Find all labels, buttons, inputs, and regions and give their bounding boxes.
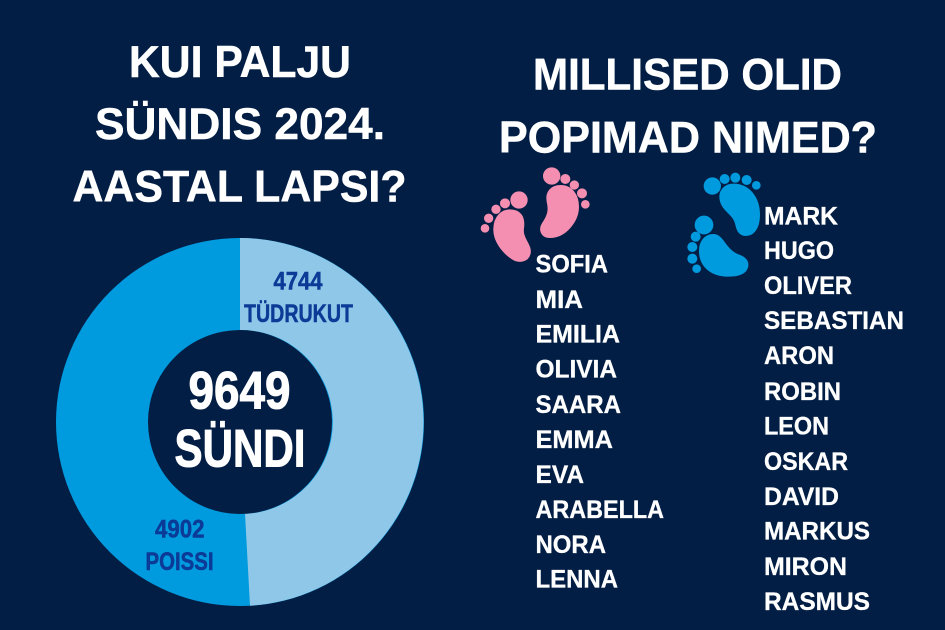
list: popular girl names: NORA [536, 532, 606, 559]
list: popular girl names [536, 252, 664, 594]
list: popular boy names [764, 204, 904, 616]
list: popular boy names: ROBIN [764, 379, 841, 406]
donut chart: births by sex [56, 238, 424, 606]
title: births heading: AASTAL LAPSI? [72, 162, 406, 212]
list: popular boy names: RASMUS [764, 589, 870, 616]
label: boys count: POISSI [146, 548, 214, 576]
list: popular girl names: MIA [536, 287, 583, 314]
list: popular boy names: OSKAR [764, 449, 848, 476]
donut segment: boys [56, 238, 424, 606]
list: popular girl names: ARABELLA [536, 497, 664, 524]
list: popular girl names: EVA [536, 462, 584, 489]
list: popular boy names: MARKUS [764, 518, 870, 546]
centre total: SÜNDI [174, 420, 306, 478]
centre total [174, 362, 306, 478]
label: girls count: TÜDRUKUT [244, 299, 353, 328]
list: popular boy names: HUGO [764, 238, 834, 265]
title: names heading: MILLISED OLID [533, 50, 842, 100]
title: births heading [72, 38, 406, 212]
label: boys count: 4902 [155, 516, 204, 544]
list: popular girl names: EMMA [536, 427, 613, 454]
list: popular boy names: SEBASTIAN [764, 308, 904, 335]
list: popular boy names: DAVID [764, 484, 839, 511]
list: popular girl names: LENNA [536, 566, 618, 594]
title: names heading: POPIMAD NIMED? [499, 114, 877, 162]
list: popular boy names: LEON [764, 414, 829, 440]
icon: blue baby feet [688, 173, 760, 276]
list: popular girl names: OLIVIA [536, 356, 617, 384]
list: popular boy names: OLIVER [764, 273, 852, 300]
title: names heading [499, 50, 877, 162]
label: boys count [146, 516, 214, 576]
title: births heading: KUI PALJU [129, 38, 351, 87]
donut centre hole [148, 330, 332, 514]
list: popular girl names: SAARA [536, 392, 621, 419]
icon: pink baby feet [481, 168, 589, 261]
list: popular girl names: SOFIA [536, 252, 608, 278]
label: girls count: 4744 [274, 268, 323, 296]
list: popular boy names: ARON [764, 343, 834, 370]
list: popular girl names: EMILIA [536, 322, 620, 349]
list: popular boy names: MARK [764, 204, 838, 230]
centre total: 9649 [188, 362, 290, 420]
title: births heading: SÜNDIS 2024. [95, 100, 385, 149]
label: girls count [244, 268, 353, 328]
donut segment: girls [240, 238, 424, 606]
list: popular boy names: MIRON [764, 554, 847, 581]
